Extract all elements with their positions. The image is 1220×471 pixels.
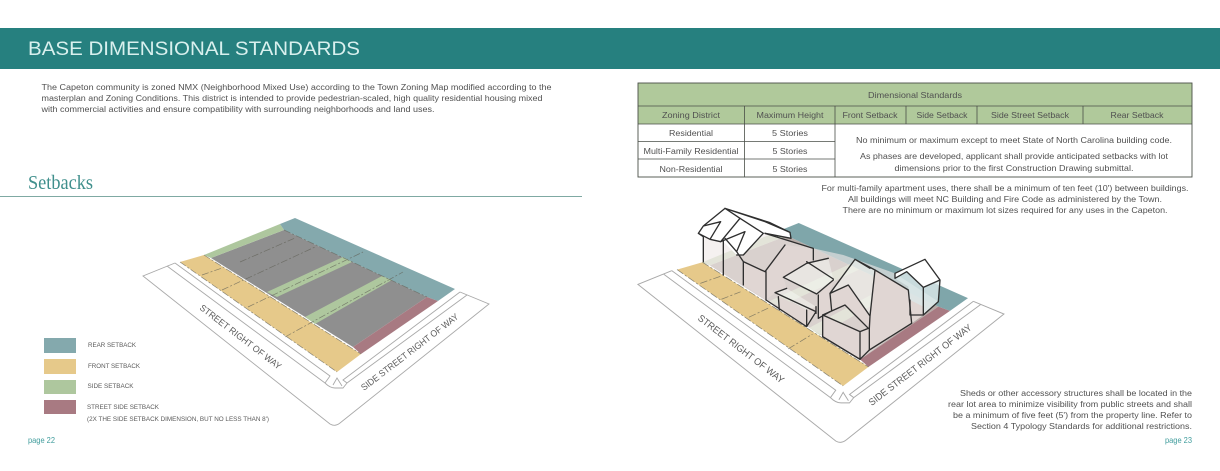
diagram: setback site plan: SIDE STREET RIGHT OF WAY — [359, 312, 460, 393]
intro paragraph: The Capeton community is zoned NMX (Neighborhood Mixed Use) according to the Town Zoning Map modified according to the — [42, 82, 552, 92]
shed — [895, 272, 923, 315]
intro paragraph: with commercial activities and ensure compatibility with surrounding neighborhoods and land uses. — [40, 104, 435, 114]
site plan base: SIDE STREET RIGHT OF WAY — [867, 322, 975, 408]
table: dimensional standards: Front Setback — [842, 110, 898, 120]
text: building requirements: All buildings will meet NC Building and Fire Code as administered by the Town. — [848, 194, 1162, 204]
left house walls — [743, 245, 813, 300]
table: dimensional standards: Dimensional Standards — [868, 90, 962, 100]
buildings — [698, 208, 940, 359]
diagram: setback site plan: STREET RIGHT OF WAY — [198, 303, 283, 371]
text: building requirements: For multi-family apartment uses, there shall be a minimum of ten feet (10') between buildings. — [822, 183, 1188, 193]
site plan base: STREET RIGHT OF WAY — [695, 313, 786, 386]
legend: (2X THE SIDE SETBACK DIMENSION, BUT NO LESS THAN 8') — [87, 416, 269, 423]
title banner — [0, 28, 1220, 69]
table: dimensional standards: 5 Stories — [772, 128, 808, 138]
table: dimensional standards: Maximum Height — [756, 110, 824, 120]
page number right: page 23 — [1165, 435, 1192, 445]
table: dimensional standards: Rear Setback — [1110, 110, 1164, 120]
right building walls — [818, 280, 833, 318]
roofs — [698, 208, 791, 255]
table: dimensional standards: Non-Residential — [660, 164, 723, 174]
diagram: setback site plan with buildings — [638, 208, 1004, 442]
text: accessory structures: Sheds or other accessory structures shall be located in the — [960, 388, 1192, 398]
table: dimensional standards: dimensions prior to the first Construction Drawing submittal. — [894, 163, 1134, 173]
front gable walls — [823, 315, 860, 359]
intro paragraph — [40, 82, 552, 114]
text: building requirements: There are no minimum or maximum lot sizes required for any uses in the Capeton. — [842, 205, 1168, 215]
table: dimensional standards: Residential — [669, 128, 713, 138]
intro paragraph: masterplan and Zoning Conditions. This district is intended to provide pedestrian-scaled, high quality residential housing mixed — [42, 93, 543, 103]
text: accessory structures: be a minimum of five feet (5') from the property line. Refer to — [953, 410, 1192, 420]
legend: REAR SETBACK — [88, 342, 137, 349]
page number left: page 22 — [28, 435, 55, 445]
text: accessory structures — [948, 388, 1192, 431]
text: accessory structures: Section 4 Typology Standards for additional restrictions. — [971, 421, 1192, 431]
porch walls — [779, 297, 807, 327]
table: dimensional standards: Side Street Setback — [991, 110, 1070, 120]
site plan base — [638, 223, 1004, 442]
legend: SIDE SETBACK — [88, 383, 134, 390]
legend: FRONT SETBACK — [88, 363, 141, 370]
legend: STREET SIDE SETBACK — [87, 404, 160, 411]
table: dimensional standards — [638, 83, 1192, 177]
title banner: BASE DIMENSIONAL STANDARDS — [28, 38, 360, 60]
legend — [44, 338, 269, 423]
table: dimensional standards: Side Setback — [916, 110, 968, 120]
text: accessory structures: rear lot area to minimize visibility from public streets and shall — [948, 399, 1192, 409]
table: dimensional standards: Zoning District — [662, 110, 721, 120]
diagram: setback site plan — [143, 218, 489, 425]
table: dimensional standards: 5 Stories — [772, 146, 808, 156]
translucent wash over the building footprint — [703, 233, 938, 359]
table: dimensional standards: As phases are developed, applicant shall provide anticipated setbacks with lot — [860, 151, 1169, 161]
table: dimensional standards: No minimum or maximum except to meet State of North Carolina building code. — [856, 135, 1172, 145]
heading: Setbacks: Setbacks — [28, 172, 93, 194]
table: dimensional standards: 5 Stories — [772, 164, 808, 174]
table: dimensional standards: Multi-Family Residential — [644, 146, 739, 156]
text: building requirements — [822, 183, 1188, 215]
